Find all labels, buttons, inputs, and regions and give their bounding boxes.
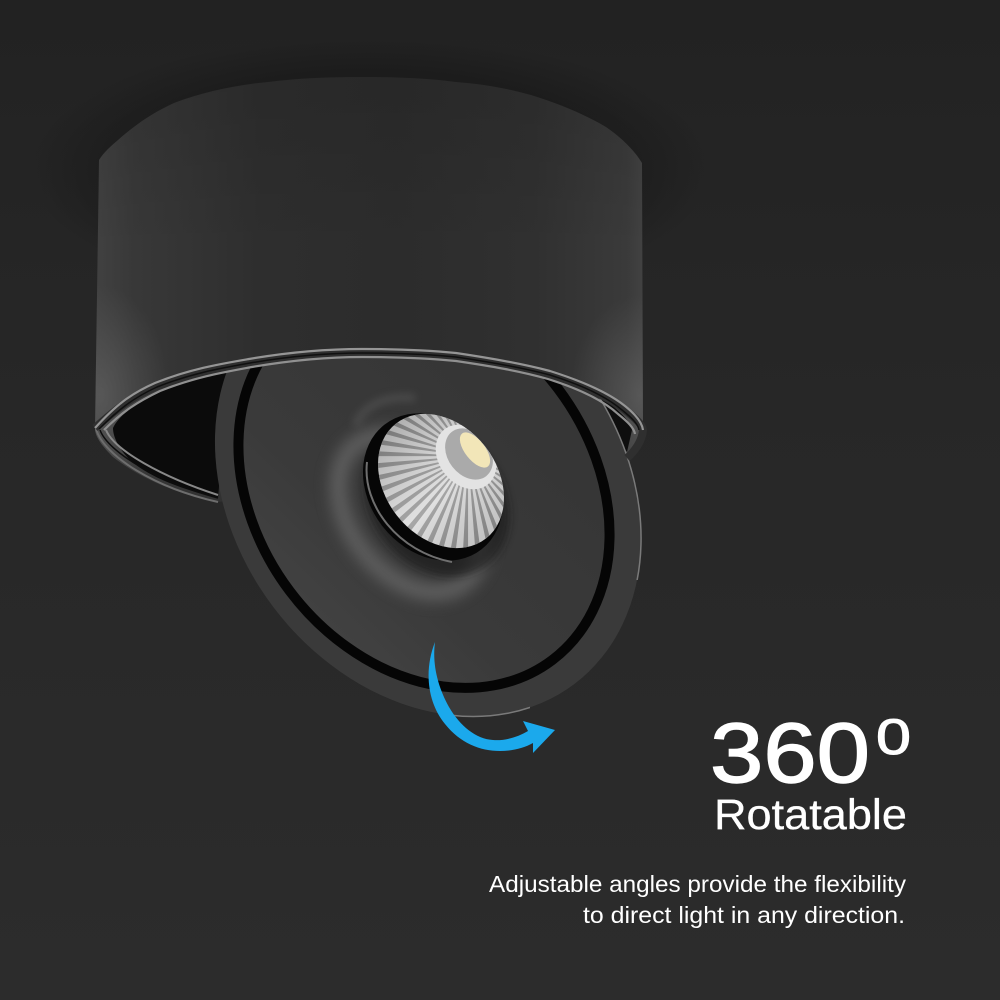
reflector radial fins <box>378 414 504 548</box>
infographic canvas <box>72 47 910 928</box>
lens collar highlight <box>367 462 452 562</box>
lens surround lighting <box>309 395 539 620</box>
heading: 360 degrees: 360 <box>710 706 870 800</box>
LED lens module <box>363 413 504 563</box>
description text: to direct light in any direction. <box>583 902 905 928</box>
cylinder cast shadow <box>30 35 710 305</box>
cylinder lower rim: left <box>96 429 218 502</box>
reflector silver cone <box>352 389 530 573</box>
rotating disc <box>215 358 642 718</box>
LED chip surround <box>445 428 493 480</box>
description text <box>489 871 907 928</box>
disc outer ring <box>215 368 640 716</box>
arrow: blue rotation arrow <box>429 642 555 753</box>
LED chip <box>460 432 490 468</box>
lens black collar <box>334 385 532 589</box>
description text: Adjustable angles provide the flexibility <box>489 871 907 897</box>
heading: 360 degrees <box>710 706 911 800</box>
cylinder lower rim: top band <box>95 349 643 458</box>
degree zero superscript: 0 <box>876 709 911 765</box>
disc edge highlight <box>454 398 642 718</box>
LED inner collar <box>436 424 496 490</box>
subheading: Rotatable: Rotatable <box>714 791 907 839</box>
cylinder inner opening: left <box>113 366 250 498</box>
black groove and inner face <box>234 366 614 693</box>
lamp cylinder body <box>95 77 643 502</box>
cylinder inner opening: right <box>560 378 632 452</box>
